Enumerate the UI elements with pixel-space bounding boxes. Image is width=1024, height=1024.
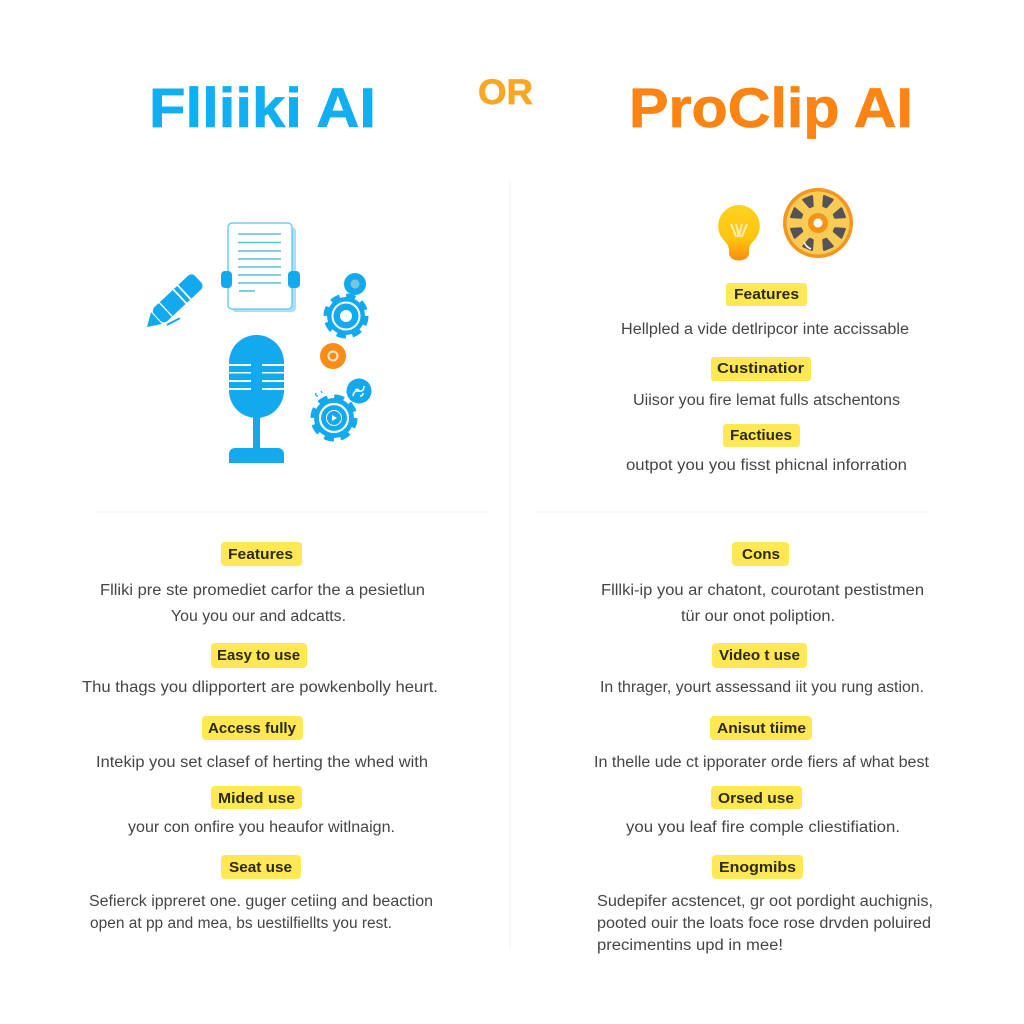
tag: Custinatior: Custinatior	[717, 361, 804, 377]
tag: Factiues	[723, 424, 800, 447]
tag: Orsed use: Orsed use	[718, 791, 794, 807]
tag: Mided use	[211, 786, 302, 809]
text: seat use description: open at pp and mea, bs uestilfiellts you rest.	[90, 915, 392, 932]
tag: Seat use: Seat use	[229, 860, 292, 876]
text: enogmibs description	[597, 893, 933, 954]
text: customisation description: Uiisor you fire lemat fulls atschentons	[633, 392, 900, 409]
icon: pencil	[141, 272, 209, 339]
tag: Custinatior	[711, 357, 811, 381]
icon: document held by hands	[221, 223, 300, 312]
text: seat use description	[89, 893, 433, 932]
tag: Features: Features	[228, 547, 293, 563]
panel: Flliiki features list	[82, 542, 438, 932]
panel: ProClip cons list	[594, 542, 933, 954]
OR label: OR	[478, 73, 533, 112]
text: easy to use description: Thu thags you dlipportert are powkenbolly heurt.	[82, 679, 438, 696]
text: mided use description: your con onfire you heaufor witlnaign.	[128, 819, 395, 836]
tag: Mided use: Mided use	[218, 791, 295, 807]
icon: light bulb	[718, 205, 760, 260]
title: Flliiki AI: Flliiki AI	[149, 76, 376, 139]
tag: Enogmibs	[712, 855, 803, 879]
tag: Orsed use	[711, 786, 802, 809]
icon: orange chat badge	[320, 343, 346, 369]
panel: ProClip top notes	[621, 283, 909, 474]
tag: Easy to use	[211, 643, 307, 668]
tag: Features	[221, 542, 302, 566]
text: cons description	[601, 582, 924, 625]
text: features description	[100, 582, 425, 625]
icon: gear top	[326, 296, 366, 336]
tag: Cons	[732, 542, 789, 566]
text: features description: You you our and adcatts.	[171, 608, 346, 625]
tag: Enogmibs: Enogmibs	[719, 860, 796, 876]
text: access description: Intekip you set clasef of herting the whed with	[96, 754, 428, 771]
tag: Video t use: Video t use	[719, 648, 800, 664]
text: anisut time description: In thelle ude ct ipporater orde fiers af what best	[594, 754, 930, 771]
tag: Easy to use: Easy to use	[217, 648, 300, 664]
text: enogmibs description: precimentins upd in mee!	[597, 937, 783, 954]
tag: Seat use	[221, 855, 301, 879]
text: features description: Hellpled a vide detlripcor inte accissable	[621, 321, 909, 338]
text: orsed use description: you you leaf fire comple cliestifiation.	[626, 819, 900, 836]
icon: link badge	[346, 378, 372, 404]
tag: Factiues: Factiues	[730, 428, 792, 444]
tag: Video t use	[712, 643, 807, 668]
text: seat use description: Sefierck ippreret one. guger cetiing and beaction	[89, 893, 433, 910]
icon: microphone	[229, 335, 284, 463]
title: ProClip AI: ProClip AI	[629, 76, 913, 139]
text: enogmibs description: Sudepifer acstencet, gr oot pordight auchignis,	[597, 893, 933, 910]
tag: Access fully: Access fully	[208, 721, 296, 737]
icon: small cog circle	[344, 273, 366, 295]
tag: Anisut time: Anisut tiime	[717, 721, 806, 737]
icon: gear bottom with play	[312, 391, 356, 440]
tag: Features	[726, 283, 807, 306]
text: features description: Flliki pre ste promediet carfor the a pesietlun	[100, 582, 425, 599]
icon: film reel	[783, 188, 853, 258]
tag: Features: Features	[734, 287, 799, 303]
text: factiues description: outpot you you fisst phicnal inforration	[626, 457, 907, 474]
tag: Access fully	[202, 716, 303, 740]
text: cons description: tür our onot poliption.	[681, 608, 835, 625]
tag: Anisut time	[710, 716, 812, 740]
text: video use description: In thrager, yourt assessand iit you rung astion.	[600, 679, 924, 696]
text: cons description: Flllki-ip you ar chatont, courotant pestistmen	[601, 582, 924, 599]
text: enogmibs description: pooted ouir the loats foce rose drvden poluired	[597, 915, 931, 932]
tag: Cons: Cons	[742, 547, 780, 563]
